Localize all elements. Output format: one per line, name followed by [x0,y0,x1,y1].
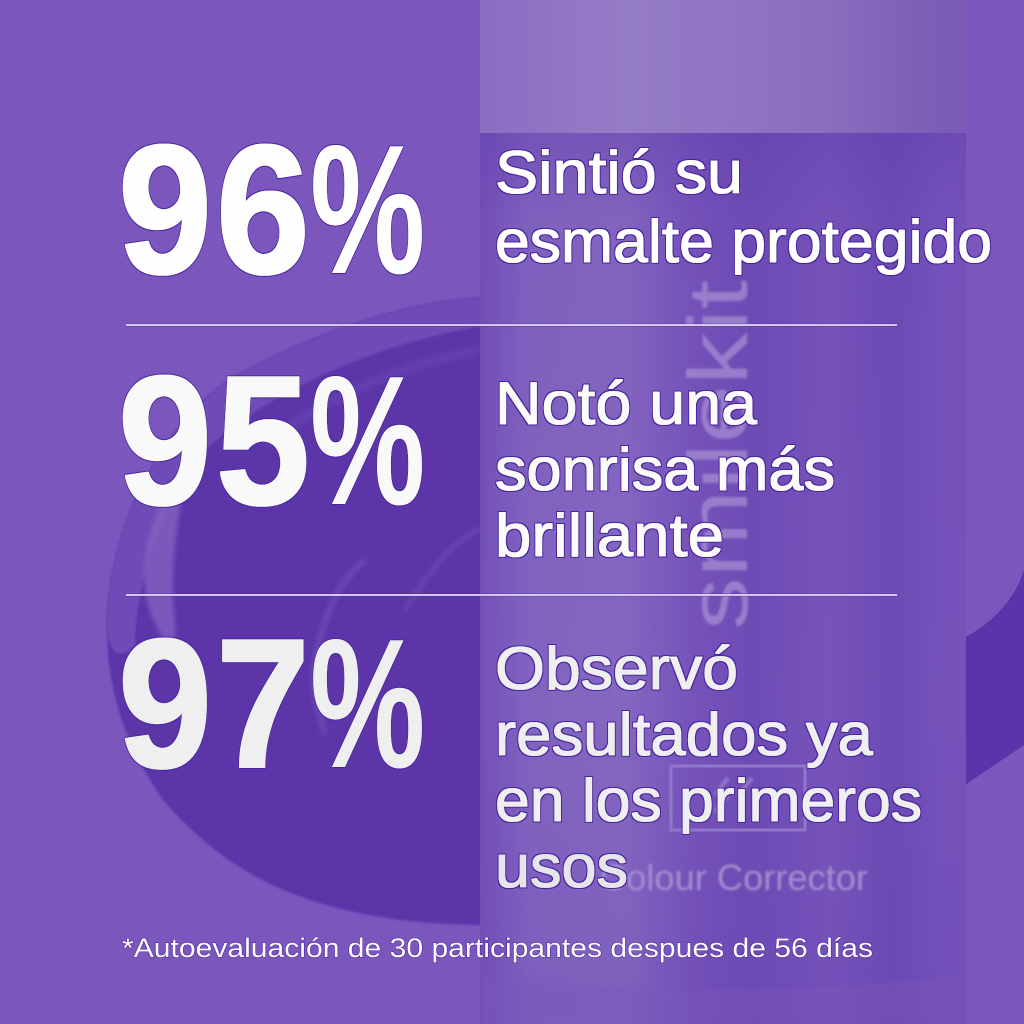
label: Sintió su esmalte protegido: Sintió su [495,139,743,206]
value 97%: 97 [118,602,314,807]
value 97%: % [310,601,425,806]
blob highlights [143,504,182,638]
tube cap [480,0,966,133]
label: Observó resultados ya en los primeros usos [495,635,922,900]
divider [126,594,898,596]
stat row: 96% [118,107,992,313]
tube logo: smilekit [671,280,765,630]
stat row: 97% [118,601,922,900]
tube product name: Colour Corrector [600,857,868,898]
label: Observó resultados ya en los primeros usos: Observó [495,635,738,702]
value 95%: % [310,338,425,543]
label: Notó una sonrisa más brillante [495,370,835,569]
label: Sintió su esmalte protegido [495,139,992,275]
product tube [480,0,966,1024]
label: Notó una sonrisa más brillante: Notó una [495,370,758,437]
label: Observó resultados ya en los primeros usos: usos [495,833,628,900]
value 96%: % [310,107,425,312]
value 97% [118,601,425,807]
footnote: *Autoevaluación de 30 participantes despues de 56 días [122,933,873,963]
value 95%: 95 [118,339,314,544]
divider [126,324,898,326]
tube badge [671,766,805,830]
blob body [107,297,490,925]
value 95% [118,338,425,544]
label: Notó una sonrisa más brillante: brillante [495,502,724,569]
label: Observó resultados ya en los primeros usos: en los primeros [495,767,922,834]
tube body [480,133,966,1024]
value 96%: 96 [118,108,314,313]
tube base edge [480,975,966,1024]
stat row: 95% [118,338,835,569]
label: Notó una sonrisa más brillante: sonrisa más [495,436,835,503]
value 96% [118,107,425,313]
label: Observó resultados ya en los primeros usos: resultados ya [495,701,874,768]
label: Sintió su esmalte protegido: esmalte protegido [495,208,992,275]
tube shading [480,133,966,1024]
blob right part [965,570,1024,785]
blob upper ring [107,297,490,653]
product swatch blob [107,297,1024,925]
